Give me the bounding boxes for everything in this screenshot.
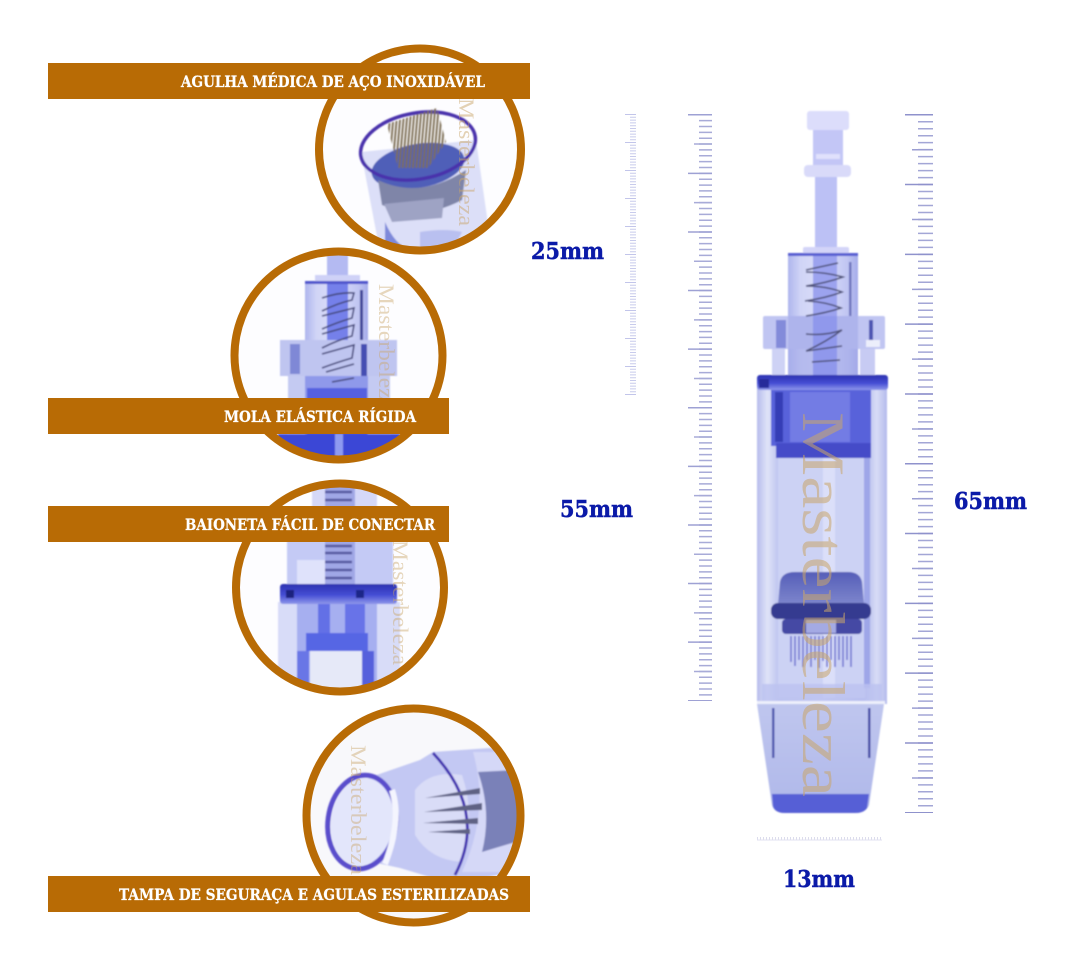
- main body: [757, 388, 887, 704]
- measurement: 55mm: 55mm: [560, 496, 633, 523]
- flange: [763, 316, 885, 376]
- watermark in circle 4: Masterbeleza: [346, 745, 371, 875]
- ruler: 65mm: [919, 114, 926, 813]
- label: bayonet: [48, 506, 449, 542]
- inner needle unit: [771, 572, 871, 668]
- label: bayonet: BAIONETA FÁCIL DE CONECTAR: [185, 515, 435, 534]
- watermark in circle 2: Masterbeleza: [374, 284, 399, 409]
- upper tube: [788, 253, 858, 378]
- label: elastic spring: MOLA ELÁSTICA RÍGIDA: [224, 407, 417, 426]
- circle: elastic spring detail: [230, 248, 448, 468]
- lower band: [757, 375, 888, 390]
- measurement: 65mm: 65mm: [954, 488, 1027, 515]
- watermark on cartridge: Masterbeleza: [790, 412, 856, 797]
- measurement: 13mm: 13mm: [783, 866, 855, 893]
- label: safety cap: TAMPA DE SEGURAÇA E AGULAS ESTERILIZADAS: [119, 885, 509, 904]
- ruler: 25mm: [630, 114, 633, 395]
- tip cap: [757, 684, 885, 813]
- circle: stainless steel needle detail: [315, 45, 525, 255]
- watermark in circle 3: Masterbeleza: [388, 540, 413, 665]
- label: stainless steel needle: AGULHA MÉDICA DE AÇO INOXIDÁVEL: [180, 72, 485, 91]
- label: safety cap: [48, 876, 530, 912]
- watermark in circle 1: Masterbeleza: [454, 98, 479, 226]
- label: stainless steel needle: [48, 63, 530, 99]
- circle: safety cap and sterilized needles detail: [303, 704, 525, 928]
- measurement: 25mm: 25mm: [531, 238, 604, 265]
- ruler: 13mm: [757, 838, 882, 840]
- plunger rod and cap: [803, 111, 851, 254]
- ruler: 55mm: [700, 114, 706, 701]
- circle: bayonet connection detail: [231, 480, 449, 698]
- product: needle cartridge full view: [757, 111, 888, 813]
- label: elastic spring: [48, 398, 449, 434]
- spring: [805, 263, 843, 362]
